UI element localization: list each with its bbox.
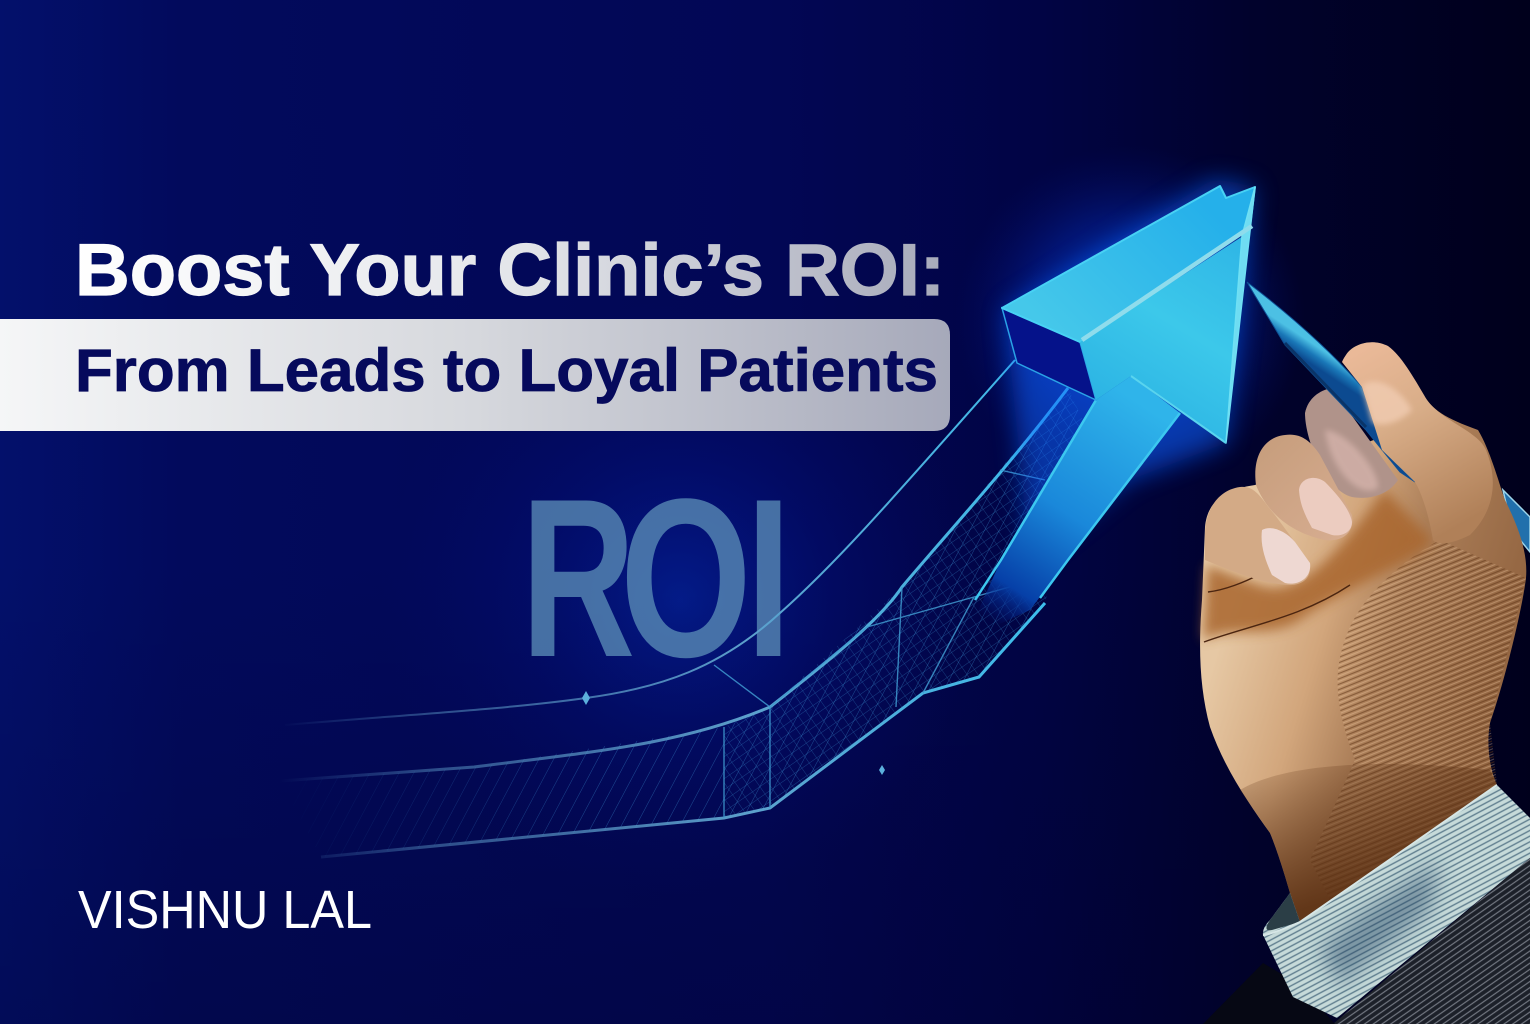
arrow glow bbox=[1005, 178, 1255, 560]
palm crease texture bbox=[1310, 540, 1526, 900]
ROI lettering: O bbox=[620, 452, 752, 705]
title line 1: Boost Your Clinic’s ROI: bbox=[75, 230, 945, 311]
ribbon top edge bbox=[280, 388, 1068, 781]
front face bbox=[1080, 236, 1243, 443]
wrist shadow bbox=[1240, 764, 1497, 922]
inner orange palm shadow bbox=[1203, 490, 1432, 640]
highlight band bbox=[1082, 226, 1252, 340]
middle nail bbox=[1299, 478, 1352, 535]
ring nail bbox=[1262, 528, 1310, 584]
dark side face bbox=[1002, 308, 1096, 400]
ribbon bottom edge bbox=[321, 603, 1045, 857]
pen bbox=[1247, 282, 1415, 482]
subtitle bar bbox=[0, 319, 950, 431]
pen rear end bbox=[1503, 490, 1530, 552]
3D arrow bbox=[965, 186, 1255, 640]
crease lines bbox=[1204, 575, 1350, 642]
palm and wrist bbox=[1200, 342, 1526, 922]
arrow shaft bbox=[965, 376, 1180, 640]
thumb bbox=[1342, 342, 1493, 543]
thin upper trend line bbox=[285, 360, 1015, 725]
fingers bbox=[1205, 435, 1352, 585]
ribbon struts bbox=[714, 470, 1045, 818]
middle finger bbox=[1255, 435, 1352, 540]
ribbon nodes bbox=[582, 691, 885, 775]
shirt cuff bbox=[1263, 785, 1530, 1018]
hand back and palm bbox=[1200, 342, 1526, 922]
ROI lettering: I bbox=[746, 452, 791, 704]
top face bbox=[1002, 186, 1255, 342]
growth arrow ribbon bbox=[280, 360, 1092, 857]
dark sleeve bbox=[1203, 963, 1335, 1024]
ROI lettering: R bbox=[521, 452, 635, 705]
ring finger bbox=[1205, 487, 1310, 585]
ROI lettering bbox=[521, 452, 791, 705]
ribbon mesh bbox=[280, 388, 1092, 857]
index finger bbox=[1305, 388, 1398, 498]
suit sleeve bbox=[1333, 858, 1530, 1024]
subtitle text: From Leads to Loyal Patients bbox=[75, 337, 938, 404]
author name: VISHNU LAL bbox=[78, 880, 372, 940]
